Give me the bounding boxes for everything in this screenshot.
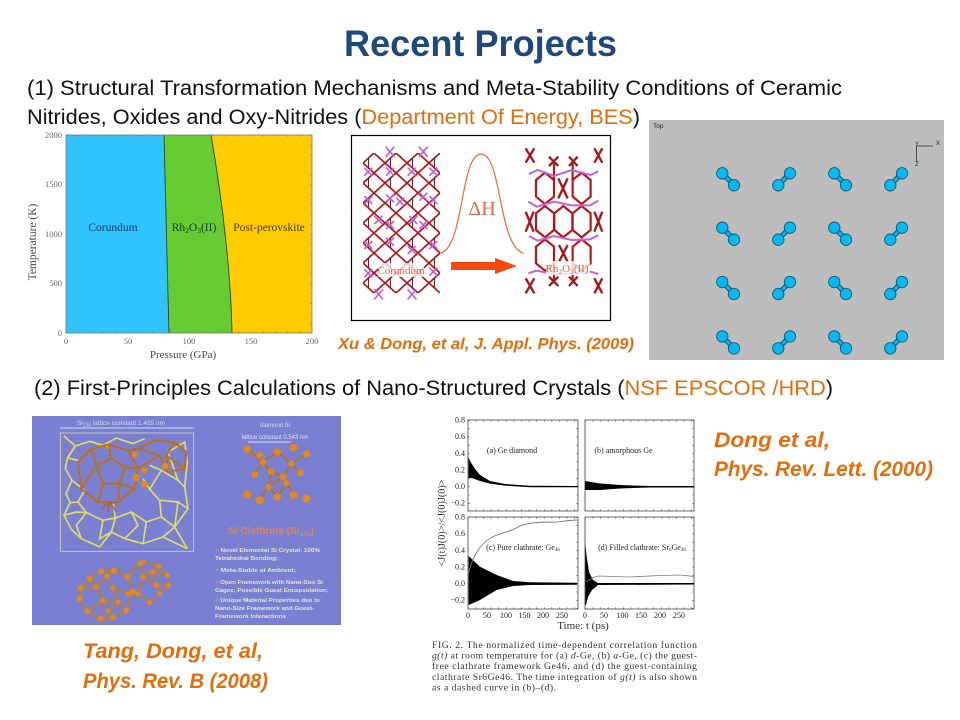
panel d: filled clathrate — [585, 517, 694, 609]
x tick labels: 250 — [673, 611, 685, 620]
axis titles: Pressure (GPa) — [150, 349, 216, 361]
bullet list: > Open Framework with Nano-Size Si — [215, 580, 323, 586]
citation: Tang Phys. Rev. B: Tang, Dong, et al, — [83, 640, 263, 663]
phase boundaries — [164, 135, 232, 333]
phase labels: Corundum — [88, 222, 138, 234]
panel: Si clathrate — [32, 416, 341, 625]
x axis tick labels: 50 — [124, 336, 132, 346]
label: Rh2O3(II): (II) — [574, 263, 589, 275]
y tick labels: 0.6 — [455, 529, 465, 538]
x axis tick labels: 200 — [306, 336, 318, 346]
figure caption — [432, 640, 697, 694]
yellow network — [64, 436, 188, 549]
heading: project 1: (1) Structural Transformation Mechanisms and Meta-Stability Conditions of Ceramic — [27, 77, 842, 100]
y axis tick labels: 1000 — [45, 229, 62, 239]
y tick labels — [450, 416, 465, 604]
figure caption: free clathrate framework Ge46, and (d) the guest-containing — [432, 661, 697, 672]
Rh2O3(II) region — [164, 135, 232, 333]
bullet list: > Novel Elemental Si Crystal: 100% — [215, 548, 320, 554]
x tick labels: 0 — [583, 611, 587, 620]
chart: correlation function four-panel plot — [437, 416, 694, 632]
panel: top view dimer lattice — [649, 120, 944, 360]
x tick labels: 200 — [537, 611, 549, 620]
panel frame — [352, 136, 610, 320]
x axis tick labels — [64, 336, 318, 346]
x tick labels: 50 — [483, 611, 491, 620]
label: Rh2O3(II): Rh — [546, 263, 558, 275]
lattice constant label 1: Si — [77, 420, 83, 427]
panel a: Ge diamond: (a) Ge diamond — [487, 446, 537, 455]
orange atoms in framework — [105, 445, 169, 488]
y tick labels: 0.0 — [455, 482, 465, 491]
chart: pressure temperature phase diagram: Temperature (K) — [27, 203, 39, 280]
heading: project 2: (2) First-Principles Calculations of Nano-Structured Crystals ( NSF EPSCOR /HRD ) — [34, 377, 833, 400]
y tick labels: 0.8 — [455, 416, 465, 424]
label: Delta H: ΔH — [468, 198, 496, 220]
heading: project 1: Nitrides, Oxides and Oxy-Nitrides ( Department Of Energy, BES ) — [27, 106, 640, 129]
bullet list: Nano-Size Framework and Guest- — [215, 606, 314, 612]
orange cages — [78, 440, 186, 502]
y tick labels: 0.2 — [455, 562, 465, 572]
label: Rh2O3(II) — [546, 261, 590, 276]
clathrate framework — [60, 433, 194, 551]
x axis tick labels: 150 — [245, 336, 257, 346]
phase labels: 3 — [197, 226, 201, 235]
title: Recent Projects — [344, 23, 617, 64]
axis indicator: Z — [915, 162, 919, 168]
phase labels — [88, 222, 305, 235]
label: Corundum: Corundum — [377, 265, 425, 277]
y tick labels: 0.4 — [455, 449, 465, 458]
y tick labels: 0.0 — [455, 579, 465, 588]
Si clathrate heading: Si Clathrate (Si — [228, 526, 299, 537]
panel d: filled clathrate: (d) Filled clathrate: Sr — [598, 543, 669, 552]
panel b: amorphous Ge: (b) amorphous Ge — [594, 446, 653, 455]
citation: Dong Phys. Rev. Lett.: Phys. Rev. Lett. (2000) — [714, 458, 933, 481]
corundum region — [66, 135, 169, 333]
bullet list: Cages; Possible Guest Encapsulation; — [215, 588, 328, 594]
bullet list: > Meta-Stable at Ambient; — [215, 568, 296, 574]
bullet list: Framework Interactions — [215, 614, 286, 620]
lattice constant label 2: lattice constant 0.543 nm — [242, 435, 308, 441]
plot frame and ticks — [66, 135, 312, 333]
x tick labels — [466, 611, 685, 620]
bullet list — [215, 548, 328, 620]
panel b: amorphous Ge — [585, 420, 694, 511]
arrow — [451, 258, 517, 274]
energy barrier curve — [440, 154, 523, 253]
axis indicator: X — [936, 141, 940, 147]
lattice constant label 1: lattice constant 1.455 nm — [91, 420, 165, 427]
lattice constant label 2: diamond Si — [260, 423, 290, 429]
lattice constant label 1: 136 — [83, 422, 91, 428]
y axis tick labels: 1500 — [45, 179, 62, 189]
citation: Dong Phys. Rev. Lett. — [714, 429, 933, 481]
panel: corundum to Rh2O3(II) transformation — [352, 136, 610, 320]
panel c: pure clathrate: 46 — [555, 548, 560, 553]
purple background — [32, 416, 341, 625]
figure caption: clathrate Sr6Ge46. The time integration of g(t) is also shown — [432, 672, 697, 683]
y tick labels: −0.2 — [450, 596, 465, 604]
post-perovskite region — [211, 135, 312, 333]
panel d: filled clathrate: 46 — [681, 548, 686, 553]
figure caption: g(t) at room temperature for (a) d-Ge, (b) a-Ge, (c) the guest- — [432, 650, 697, 662]
x axis title: Time: t (ps) — [557, 620, 609, 632]
lattice constant label 1 — [60, 420, 194, 428]
figure caption: as a dashed curve in (b)–(d). — [432, 682, 556, 694]
x axis tick labels: 0 — [64, 336, 68, 346]
panel c: pure clathrate: (c) Pure clathrate: Ge — [486, 543, 555, 552]
phase labels: O — [189, 222, 197, 234]
x tick labels: 100 — [500, 611, 512, 620]
phase labels: 2 — [185, 226, 189, 235]
x tick labels: 100 — [616, 611, 628, 620]
y tick labels: 0.6 — [455, 432, 465, 441]
y axis tick labels: 0 — [58, 328, 62, 338]
figure caption: FIG. 2. The normalized time-dependent correlation function — [432, 640, 697, 651]
x tick labels: 150 — [518, 611, 530, 620]
phase labels: (II) — [201, 222, 216, 234]
x tick labels: 200 — [654, 611, 666, 620]
axis indicator — [915, 141, 940, 168]
diamond Si crystal — [243, 444, 310, 504]
panel d: filled clathrate: Ge — [672, 543, 681, 552]
y axis tick labels — [45, 130, 62, 338]
citation: Xu & Dong: Xu & Dong, et al, J. Appl. Phys. (2009) — [337, 336, 634, 353]
corundum lattice — [363, 147, 440, 299]
y tick labels: 0.8 — [455, 512, 465, 522]
label: Rh2O3(II): 2 — [558, 267, 562, 276]
phase labels: Post-perovskite — [233, 222, 305, 234]
citation: Dong Phys. Rev. Lett.: Dong et al, — [714, 429, 830, 452]
chart: pressure temperature phase diagram — [27, 130, 318, 361]
y axis tick labels: 2000 — [45, 130, 62, 140]
panel c: pure clathrate — [468, 517, 578, 609]
label: Top: Top — [653, 123, 664, 130]
x axis tick labels: 100 — [183, 336, 195, 346]
panel a: Ge diamond — [468, 420, 578, 511]
axis indicator: Y — [915, 142, 919, 148]
bullet list: Tetrahedral Bonding; — [215, 556, 278, 562]
Si clathrate heading: ) — [310, 526, 314, 537]
bullet list: > Unique Material Properties due to — [215, 598, 320, 604]
y tick labels: −0.2 — [450, 498, 465, 508]
phase labels: Rh — [172, 222, 185, 234]
heading: project 1 — [27, 77, 842, 129]
grey background — [649, 120, 944, 360]
x tick labels: 250 — [556, 611, 568, 620]
y axis tick labels: 500 — [49, 278, 62, 288]
x tick labels: 150 — [635, 611, 647, 620]
Si cage molecules — [77, 559, 171, 622]
label: Rh2O3(II): 3 — [570, 267, 574, 276]
x tick labels: 0 — [466, 611, 470, 620]
x tick labels: 50 — [600, 611, 608, 620]
panel d: filled clathrate: 6 — [669, 548, 672, 553]
y tick labels: 0.4 — [455, 546, 465, 555]
citation: Tang Phys. Rev. B — [83, 640, 268, 693]
y axis title: <J(t)J(0)>/<J(0)J(0)> — [437, 479, 448, 566]
citation: Tang Phys. Rev. B: Phys. Rev. B (2008) — [83, 670, 268, 693]
y tick labels: 0.2 — [455, 466, 465, 474]
lattice constant label 2 — [242, 423, 308, 442]
Rh2O3(II) lattice — [526, 148, 602, 293]
label: Rh2O3(II): O — [562, 263, 570, 275]
Si clathrate heading: 136 — [299, 531, 311, 538]
dimers — [717, 168, 908, 354]
